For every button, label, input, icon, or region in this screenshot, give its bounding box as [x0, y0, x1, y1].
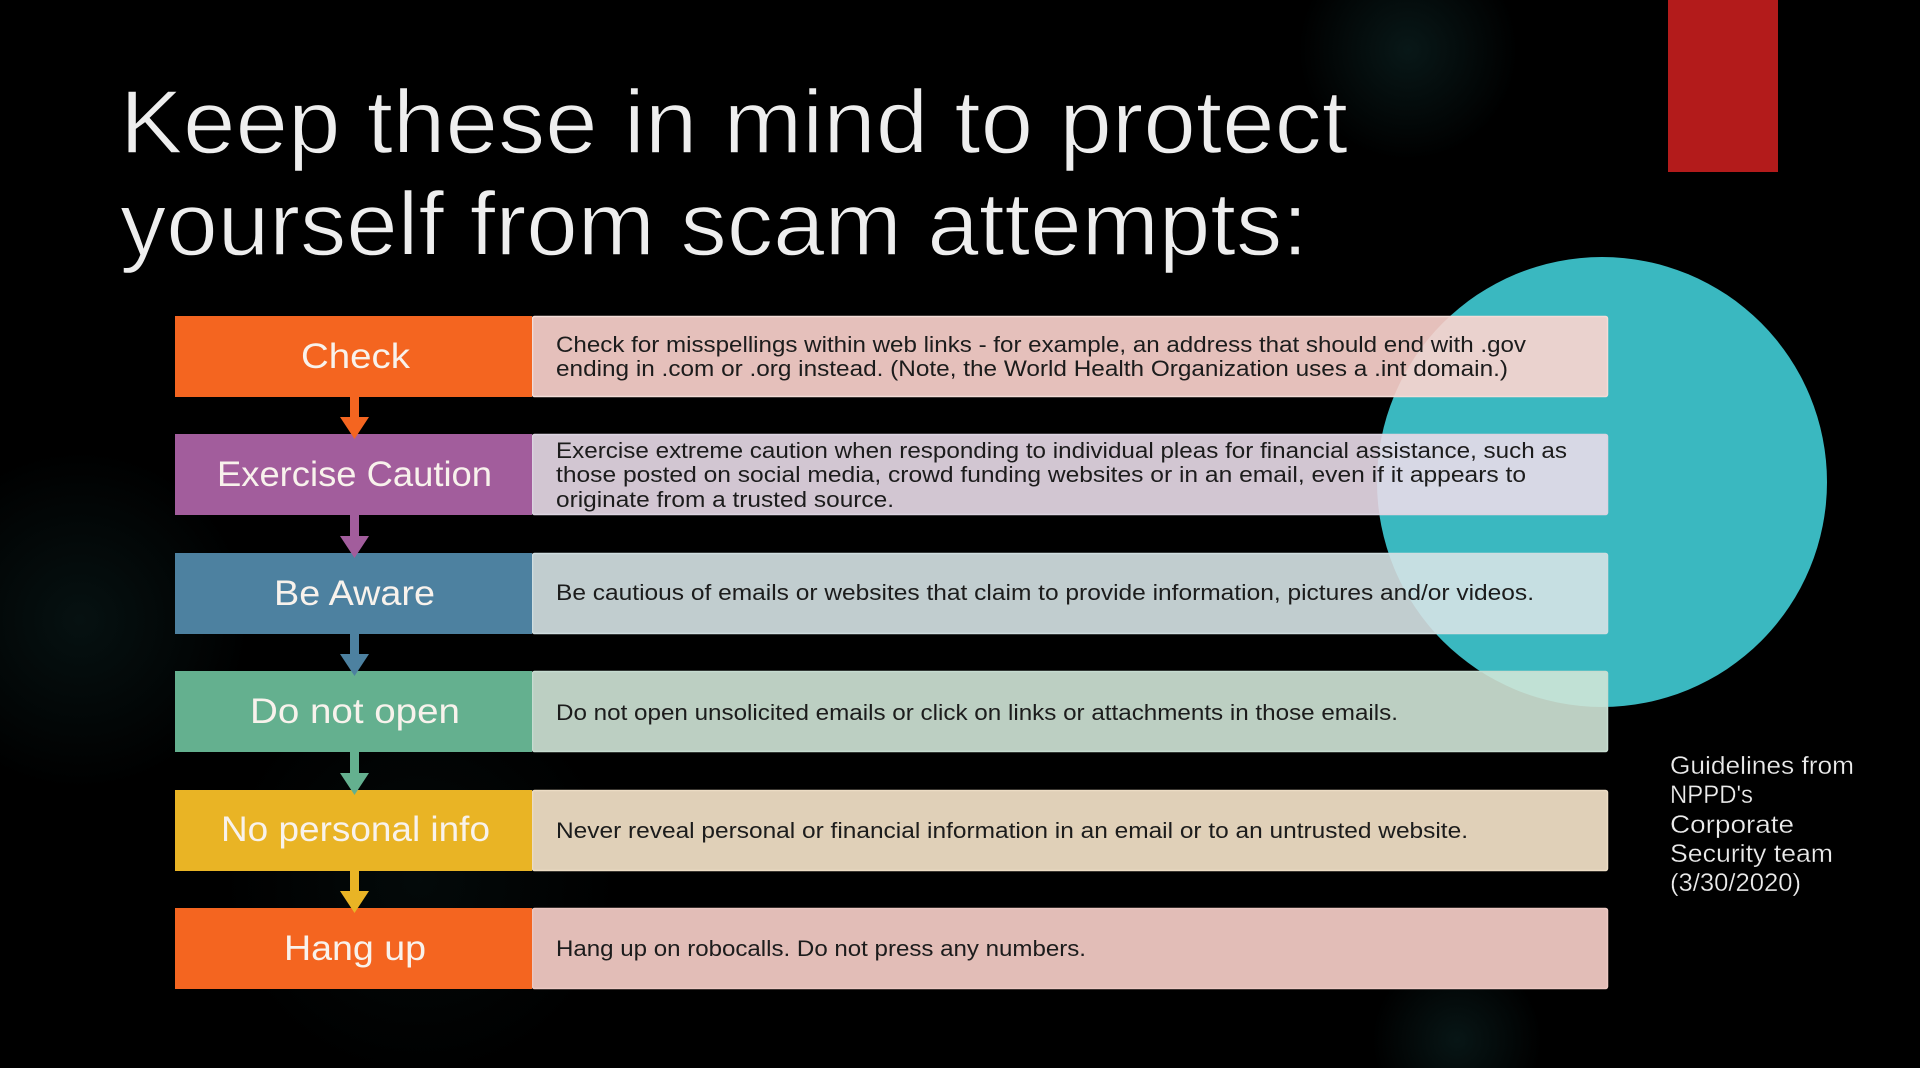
label box: exercise caution: Exercise Caution	[217, 455, 492, 494]
accent: teal circle	[1377, 257, 1827, 707]
description box: check	[532, 316, 1608, 396]
title: yourself from scam attempts:	[120, 175, 1308, 275]
source note: NPPD's	[1670, 781, 1753, 809]
description box: check: ending in .com or .org instead. (Note, the World Health Organization uses a .int domain.)	[556, 356, 1508, 381]
panel: hang up row	[175, 908, 1608, 989]
description box: exercise caution: Exercise extreme caution when responding to individual pleas for financial assistance, such as	[556, 438, 1567, 463]
description box: be aware: Be cautious of emails or websites that claim to provide information, pictures and/or videos.	[556, 580, 1534, 605]
source note	[1670, 752, 1854, 897]
description box: do not open	[532, 672, 1608, 752]
description box: hang up: Hang up on robocalls. Do not press any numbers.	[556, 936, 1086, 961]
panel: exercise caution row	[175, 434, 1608, 515]
arrow: no personal info to hang up	[340, 870, 369, 913]
label box: exercise caution	[175, 434, 532, 515]
description box: check: Check for misspellings within web links - for example, an address that should end with .gov	[556, 332, 1527, 357]
label box: check	[175, 316, 532, 397]
panel: check row	[175, 316, 1608, 397]
label box: be aware: Be Aware	[274, 574, 435, 613]
description box: no personal info	[532, 790, 1608, 870]
description box: be aware	[532, 554, 1608, 634]
source note: Security team	[1670, 840, 1833, 868]
arrow: check to exercise caution	[340, 396, 369, 439]
title: Keep these in mind to protect	[120, 73, 1348, 173]
panel: no personal info row	[175, 790, 1608, 871]
description box: exercise caution: those posted on social media, crowd funding websites or in an email, even if it appears to	[556, 462, 1526, 487]
description box: exercise caution	[532, 434, 1608, 514]
label box: hang up: Hang up	[284, 929, 426, 968]
title	[120, 73, 1348, 275]
description box: hang up	[532, 908, 1608, 988]
source note: Guidelines from	[1670, 752, 1854, 780]
label box: do not open	[175, 671, 532, 752]
label box: hang up	[175, 908, 532, 989]
label box: check: Check	[301, 337, 411, 376]
description box: do not open: Do not open unsolicited emails or click on links or attachments in those emails.	[556, 700, 1398, 725]
arrow: exercise caution to be aware	[340, 514, 369, 558]
arrow: be aware to do not open	[340, 633, 369, 676]
panel: be aware row	[175, 553, 1608, 634]
label box: no personal info	[175, 790, 532, 871]
label box: do not open: Do not open	[250, 692, 460, 731]
description box: exercise caution: originate from a trusted source.	[556, 487, 894, 512]
label box: be aware	[175, 553, 532, 634]
panel: do not open row	[175, 671, 1608, 752]
arrow: do not open to no personal info	[340, 751, 369, 795]
accent: red rectangle	[1668, 0, 1778, 172]
label box: no personal info: No personal info	[221, 810, 490, 849]
source note: Corporate	[1670, 811, 1794, 839]
description box: no personal info: Never reveal personal or financial information in an email or to an untrusted website.	[556, 818, 1468, 843]
source note: (3/30/2020)	[1670, 869, 1801, 897]
